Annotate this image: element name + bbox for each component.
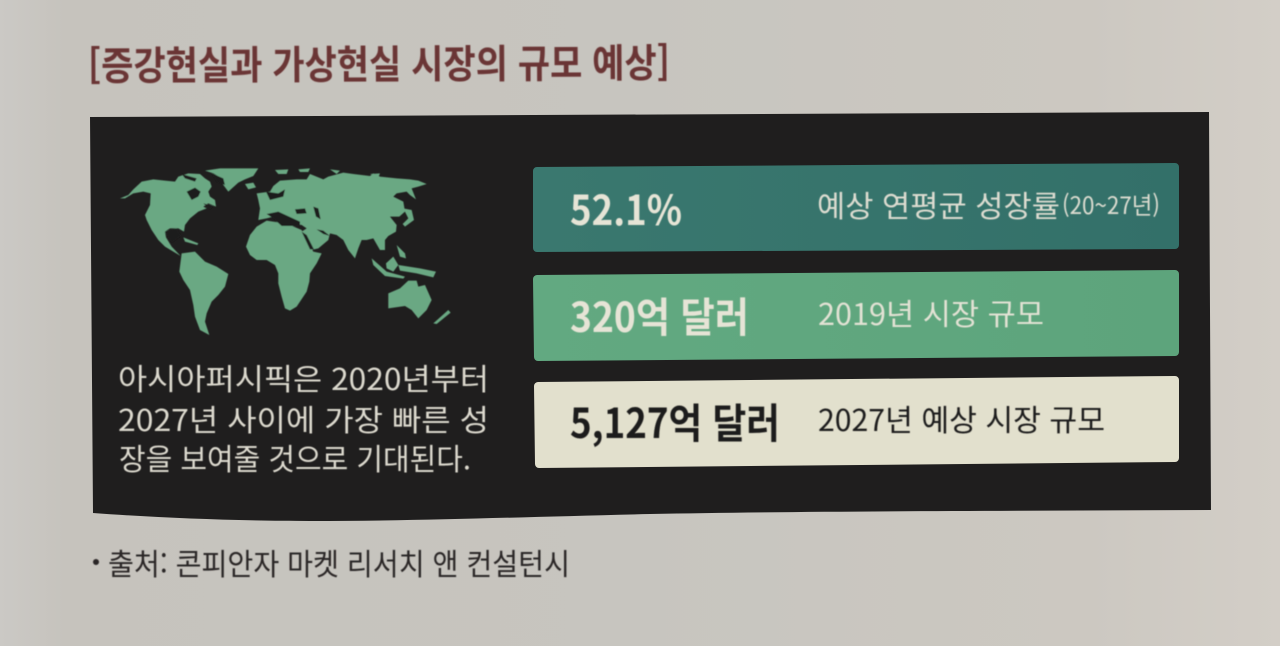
title: [증강현실과 가상현실 시장의 규모 예상] [88,33,670,92]
bar: growth rate [537,167,1175,248]
bar: 2019 market size [537,274,1175,357]
bar: 2019 market size: 2019년 시장 규모 [818,290,1044,334]
bar: growth rate: (20~27년) [1062,186,1160,221]
text block: Asia-Pacific note: 2027년 사이에 가장 빠른 성 [118,396,489,440]
text block: Asia-Pacific note: 아시아퍼시픽은 2020년부터 [118,355,489,399]
text block: Asia-Pacific note: 장을 보여줄 것으로 기대된다. [119,435,471,479]
bar: 2027 forecast market size: 2027년 예상 시장 규모 [818,396,1105,440]
icon: world map [120,168,451,335]
bar: growth rate: 52.1% [570,177,682,237]
bar: 2027 forecast market size [538,380,1175,464]
text block: Asia-Pacific note [118,355,489,479]
bar: 2027 forecast market size: 5,127억 달러 [570,390,780,450]
source note: 출처: 콘피안자 마켓 리서치 앤 컨설턴시 [108,540,570,584]
panel: dark market panel [90,112,1211,521]
bar: 2019 market size: 320억 달러 [570,284,749,344]
bar: growth rate: 예상 연평균 성장률 [817,182,1060,226]
map cut-outs [165,173,330,249]
